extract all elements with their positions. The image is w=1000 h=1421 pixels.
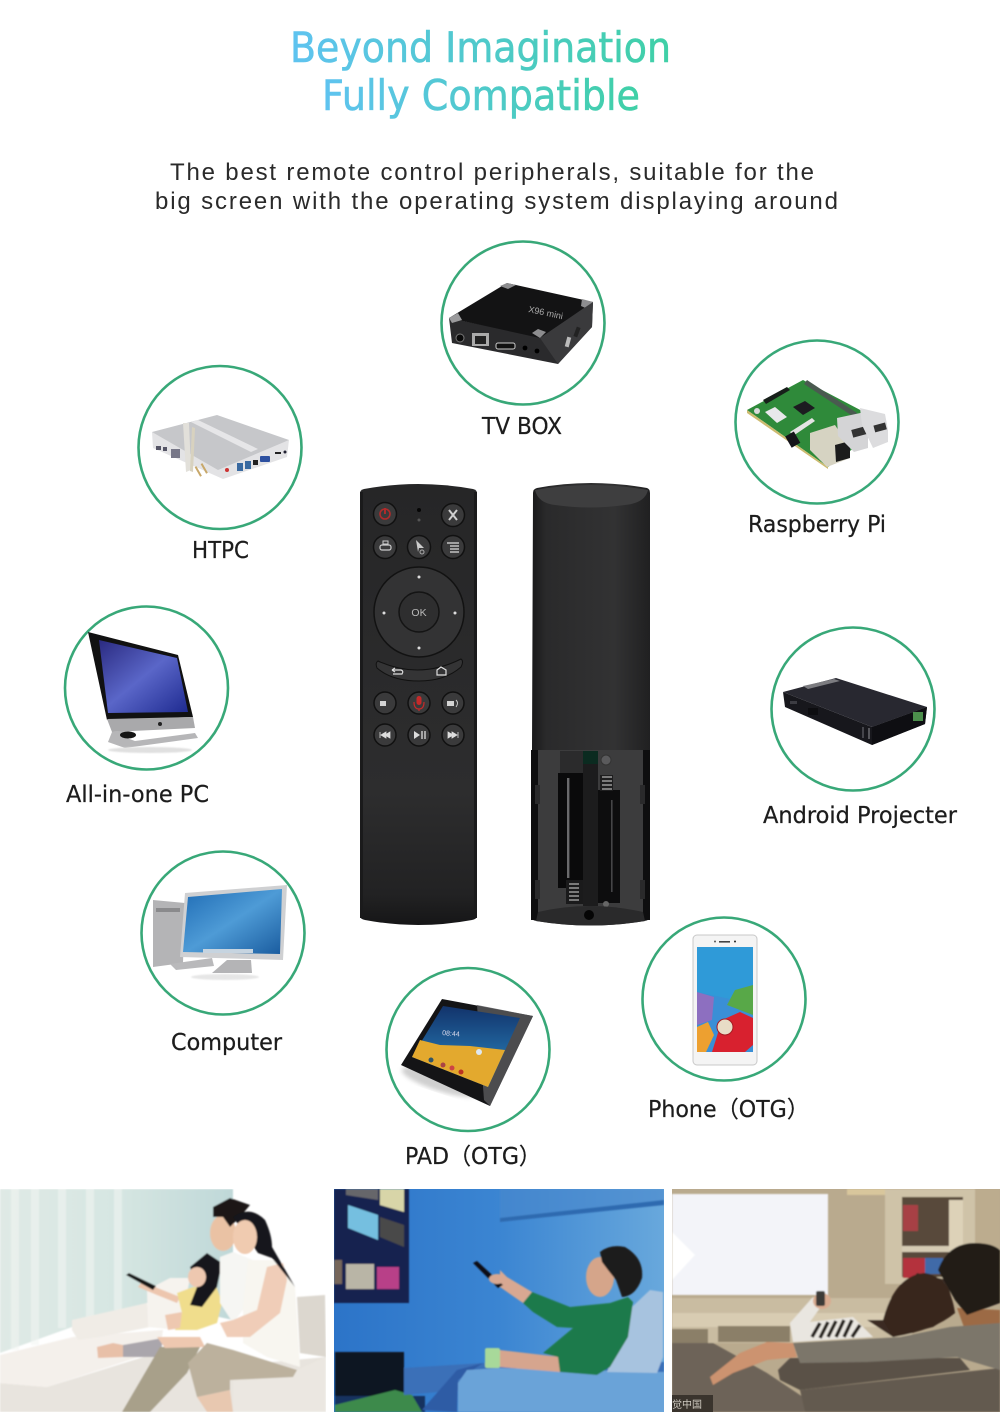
sofa bbox=[404, 1290, 664, 1412]
woman bbox=[790, 1273, 955, 1342]
battery compartment bbox=[531, 750, 650, 926]
icon: tablet: 08:44 bbox=[442, 1030, 460, 1039]
photo: family watching TV bbox=[0, 1189, 326, 1412]
watermark bbox=[672, 1395, 713, 1412]
title: Beyond Imagination bbox=[290, 23, 671, 72]
wall TV bbox=[334, 1189, 409, 1303]
button: mute bbox=[442, 504, 464, 526]
label: Android Projecter: Android Projecter bbox=[763, 803, 958, 829]
icon: Raspberry Pi bbox=[747, 380, 888, 469]
icon: All-in-one PC bbox=[88, 632, 198, 753]
watermark: 视觉中国 bbox=[662, 1398, 702, 1411]
photo: man on blue sofa bbox=[334, 1189, 664, 1412]
icon: TV box: X96 mini bbox=[528, 304, 564, 321]
label: PAD (OTG): PAD（OTG） bbox=[405, 1144, 541, 1170]
man bbox=[473, 1246, 642, 1375]
label: All-in-one PC: All-in-one PC bbox=[66, 782, 209, 808]
ring: Computer bbox=[142, 852, 304, 1014]
ring: Android Projecter bbox=[772, 628, 934, 790]
icon: phone bbox=[693, 935, 757, 1065]
button: play pause bbox=[408, 724, 430, 746]
label: Computer: Computer bbox=[171, 1030, 283, 1056]
button: volume down bbox=[374, 692, 396, 714]
button: menu bbox=[442, 536, 464, 558]
subtitle text bbox=[155, 159, 838, 215]
back and home bar bbox=[376, 659, 462, 681]
icon: TV box bbox=[449, 283, 593, 364]
cabinet and carpet bbox=[335, 1352, 425, 1412]
ring: TV box bbox=[442, 242, 604, 404]
child bbox=[97, 1253, 222, 1358]
icon: Computer bbox=[153, 885, 287, 980]
indicator lights bbox=[417, 508, 421, 522]
photo: couple watching TV bbox=[662, 1189, 1000, 1412]
title bbox=[290, 23, 671, 120]
woman bbox=[188, 1212, 300, 1412]
panel: Phone (OTG) bbox=[642, 918, 809, 1123]
d-pad bbox=[374, 567, 464, 657]
label: HTPC: HTPC bbox=[192, 538, 249, 564]
wall TV bbox=[672, 1194, 828, 1295]
curtain bbox=[0, 1189, 233, 1353]
subtitle text: big screen with the operating system displaying around bbox=[155, 188, 838, 215]
icon: Android projector bbox=[783, 678, 927, 745]
shelves bbox=[847, 1189, 1000, 1284]
d-pad: OK bbox=[411, 607, 427, 619]
panel: HTPC bbox=[138, 366, 302, 564]
sofa bbox=[672, 1343, 1000, 1412]
button: mouse cursor bbox=[408, 536, 430, 558]
panel: All-in-one PC bbox=[65, 606, 228, 808]
button: next bbox=[442, 724, 464, 746]
panel: Computer bbox=[142, 852, 304, 1056]
panel: Raspberry Pi bbox=[736, 340, 898, 538]
TV stand bbox=[672, 1298, 912, 1343]
man bbox=[710, 1243, 1000, 1385]
remote: front bbox=[360, 484, 477, 925]
ring: All-in-one PC bbox=[65, 606, 228, 770]
icon: tablet bbox=[399, 999, 533, 1106]
ring: Raspberry Pi bbox=[736, 340, 898, 504]
ring: PAD bbox=[386, 968, 550, 1131]
button: game bbox=[374, 536, 396, 558]
remote: back with battery compartment bbox=[531, 483, 650, 926]
subtitle text: The best remote control peripherals, suitable for the bbox=[170, 159, 814, 186]
title: Fully Compatible bbox=[322, 71, 640, 120]
button: previous bbox=[374, 724, 396, 746]
label: Raspberry Pi: Raspberry Pi bbox=[748, 512, 886, 538]
button: microphone bbox=[408, 692, 430, 714]
icon: HTPC bbox=[152, 415, 289, 479]
panel: PAD (OTG) bbox=[386, 968, 550, 1170]
button: volume up bbox=[442, 692, 464, 714]
panel: Android Projecter bbox=[763, 628, 958, 829]
sofa bbox=[0, 1278, 326, 1412]
man bbox=[122, 1198, 253, 1412]
label: Phone (OTG): Phone（OTG） bbox=[648, 1097, 809, 1123]
ring: Phone bbox=[642, 918, 806, 1080]
button: power bbox=[374, 502, 396, 526]
cup bbox=[485, 1348, 500, 1368]
panel: TV box bbox=[442, 242, 604, 440]
label: TV BOX: TV BOX bbox=[481, 414, 562, 440]
ring: HTPC bbox=[138, 366, 302, 529]
